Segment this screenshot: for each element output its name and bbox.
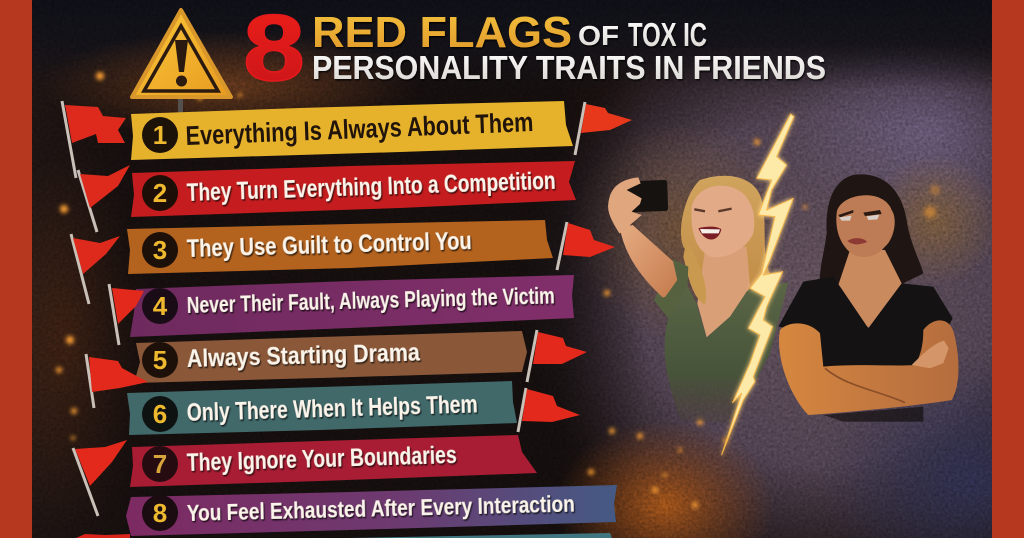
flag 2 bbox=[78, 165, 130, 232]
hand bbox=[608, 177, 642, 233]
phone bbox=[622, 180, 668, 212]
title line one: TOX IC bbox=[628, 16, 707, 53]
banner 5: Always Starting Drama bbox=[186, 338, 421, 373]
woman taking selfie bbox=[608, 176, 788, 423]
banner 7: They Ignore Your Boundaries bbox=[186, 441, 457, 477]
flag 7 bbox=[575, 102, 632, 155]
hair lock bbox=[683, 240, 706, 305]
icon: warning triangle bbox=[132, 10, 231, 114]
green shirt bbox=[654, 259, 788, 423]
title bbox=[243, 0, 826, 100]
black shirt bbox=[778, 277, 953, 370]
flag 11 partial bbox=[76, 534, 130, 538]
arm crease bbox=[825, 368, 905, 403]
banner 5: 5 bbox=[153, 345, 167, 375]
banner 2: They Turn Everything Into a Competition bbox=[186, 167, 556, 207]
red flags bbox=[62, 101, 632, 538]
banner 6: 6 bbox=[153, 399, 167, 429]
chest and neck bbox=[697, 247, 750, 337]
banner 3 bbox=[127, 220, 553, 274]
banner 5 bbox=[134, 331, 527, 383]
flag 3 bbox=[71, 234, 120, 304]
dark hair bbox=[820, 174, 923, 307]
banner 2 bbox=[131, 161, 576, 217]
banner 1: 1 bbox=[153, 120, 167, 150]
banner 2: 2 bbox=[153, 178, 167, 208]
flag 8 bbox=[557, 222, 615, 270]
sleeve bbox=[654, 259, 688, 318]
banner 6 bbox=[127, 381, 517, 435]
flag 10 bbox=[518, 388, 580, 432]
shadow under arms bbox=[823, 407, 923, 422]
title line two: PERSONALITY TRAITS IN FRIENDS bbox=[312, 49, 826, 86]
banner 1 bbox=[131, 101, 573, 160]
banner 4: Never Their Fault, Always Playing the Victim bbox=[186, 282, 555, 318]
banner 6: Only There When It Helps Them bbox=[186, 390, 478, 427]
face bbox=[691, 186, 754, 257]
banner 1: Everything Is Always About Them bbox=[185, 107, 534, 151]
flag 6 bbox=[73, 440, 127, 516]
banner 3: They Use Guilt to Control You bbox=[186, 227, 472, 263]
flag 1 bbox=[62, 101, 126, 178]
banner 4: 4 bbox=[153, 291, 168, 321]
face bbox=[836, 195, 895, 257]
banner 8: You Feel Exhausted After Every Interaction bbox=[186, 491, 575, 526]
banner 8: 8 bbox=[153, 498, 167, 528]
banner 3: 3 bbox=[153, 235, 167, 265]
woman with crossed arms bbox=[778, 174, 958, 422]
hair back bbox=[681, 176, 772, 305]
list banners bbox=[126, 101, 617, 538]
neck and chest bbox=[837, 250, 902, 328]
banner 4 bbox=[130, 275, 574, 337]
title line one: RED FLAGS bbox=[312, 8, 572, 57]
partial banner below 8 bbox=[350, 533, 612, 538]
flag 4 bbox=[109, 284, 144, 345]
hand bbox=[912, 341, 949, 368]
title line one bbox=[312, 8, 707, 57]
icon: lightning bolt bbox=[722, 114, 794, 455]
banner 7 bbox=[130, 435, 537, 487]
flag 9 bbox=[527, 330, 587, 382]
banner 7: 7 bbox=[153, 449, 167, 479]
arm bbox=[620, 225, 677, 299]
sparks bbox=[56, 72, 940, 513]
title line one: OF bbox=[578, 20, 619, 51]
flag 5 bbox=[86, 354, 148, 408]
illustration: two women bbox=[608, 114, 958, 455]
banner 8 bbox=[126, 485, 617, 536]
folded arms bbox=[779, 320, 958, 415]
